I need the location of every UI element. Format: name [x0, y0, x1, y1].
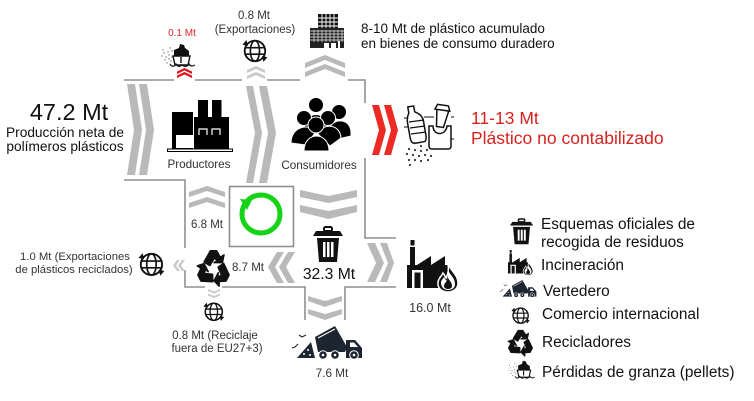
text: net polymer production: polímeros plásticos — [6, 139, 124, 154]
legend item: waste collection: recogida de residuos — [541, 234, 684, 251]
text: net polymer production: 47.2 Mt — [30, 99, 109, 125]
icon: building durable goods — [310, 14, 344, 48]
arrows: recycling outside EU — [208, 289, 220, 298]
legend item: waste collection — [510, 216, 695, 251]
text: incineration value: 16.0 Mt — [409, 301, 451, 315]
text: durable goods: en bienes de consumo duradero — [361, 36, 555, 51]
arrows: recycled plastics exports — [173, 260, 185, 271]
text: recycled value: 6.8 Mt — [191, 219, 224, 231]
text: exports value: 0.8 Mt — [238, 10, 271, 22]
arrows: to durable goods — [305, 55, 345, 77]
text: net polymer production — [6, 99, 124, 154]
label: producers: Productores — [167, 158, 231, 171]
legend item: recyclers: Recicladores — [542, 334, 631, 351]
icon: waste bin — [313, 227, 343, 262]
label: consumers: Consumidores — [281, 159, 357, 172]
legend item: landfill — [500, 280, 610, 300]
legend item: incineration: Incineración — [541, 257, 624, 274]
text: waste collected value: 32.3 Mt — [303, 266, 356, 283]
icon: unaccounted plastic waste — [404, 104, 454, 166]
arrows: waste to landfill — [308, 296, 342, 320]
text: pellet losses value: 0.1 Mt — [168, 28, 196, 39]
circular loop box — [230, 186, 294, 246]
text: recycled plastics exports: 1.0 Mt (Exportaciones — [20, 251, 130, 263]
legend item: pellet losses: Pérdidas de granza (pellets) — [542, 364, 734, 381]
text: recycling outside EU: fuera de EU27+3) — [171, 343, 263, 355]
icon: consumers people — [291, 98, 351, 151]
text: exports value: (Exportaciones) — [215, 24, 295, 36]
arrows: producers to consumers — [246, 86, 276, 183]
legend item: incineration — [508, 250, 624, 275]
arrows: unaccounted plastic — [372, 105, 398, 155]
icon: producers factory — [168, 100, 232, 152]
legend — [500, 216, 734, 381]
text: exports value — [215, 10, 295, 36]
icon: globe exports — [243, 41, 267, 61]
legend item: recyclers — [506, 330, 631, 358]
text: unaccounted plastic: Plástico no contabilizado — [471, 128, 664, 148]
text: recycling outside EU: 0.8 Mt (Reciclaje — [172, 330, 258, 342]
text: unaccounted plastic: 11-13 Mt — [471, 108, 539, 128]
icon: ship pellet losses — [161, 44, 195, 66]
flow boundary lines — [124, 80, 396, 320]
text: recycled plastics exports: de plásticos reciclados) — [15, 264, 133, 276]
arrows: recycled back to production — [189, 186, 225, 208]
arrows: exports — [247, 66, 265, 79]
text: durable goods — [361, 21, 555, 51]
arrows: net polymer production input — [127, 84, 154, 175]
text: recycled plastics exports — [15, 251, 133, 276]
text: recycling outside EU — [171, 330, 263, 355]
arrows: waste to recyclers — [268, 252, 295, 283]
icon: globe recycled exports — [139, 254, 164, 275]
arrows: pellet losses — [177, 68, 192, 78]
icon: landfill truck — [292, 326, 362, 359]
legend item: landfill: Vertedero — [543, 283, 610, 300]
icon: incineration plant — [407, 240, 458, 292]
icon: globe recycling outside EU — [204, 303, 224, 320]
text: net polymer production: Producción neta de — [6, 125, 124, 140]
arrows: waste to incineration — [367, 243, 394, 282]
text: durable goods: 8-10 Mt de plástico acumulado — [361, 21, 545, 36]
arrows: consumers to waste collection — [300, 190, 357, 219]
legend item: international trade: Comercio internacional — [542, 306, 699, 323]
text: unaccounted plastic — [471, 108, 664, 148]
text: recyclers value: 8.7 Mt — [232, 262, 265, 274]
legend item: waste collection: Esquemas oficiales de — [541, 216, 695, 233]
text: landfill value: 7.6 Mt — [316, 367, 349, 380]
icon: recyclers — [194, 251, 232, 288]
